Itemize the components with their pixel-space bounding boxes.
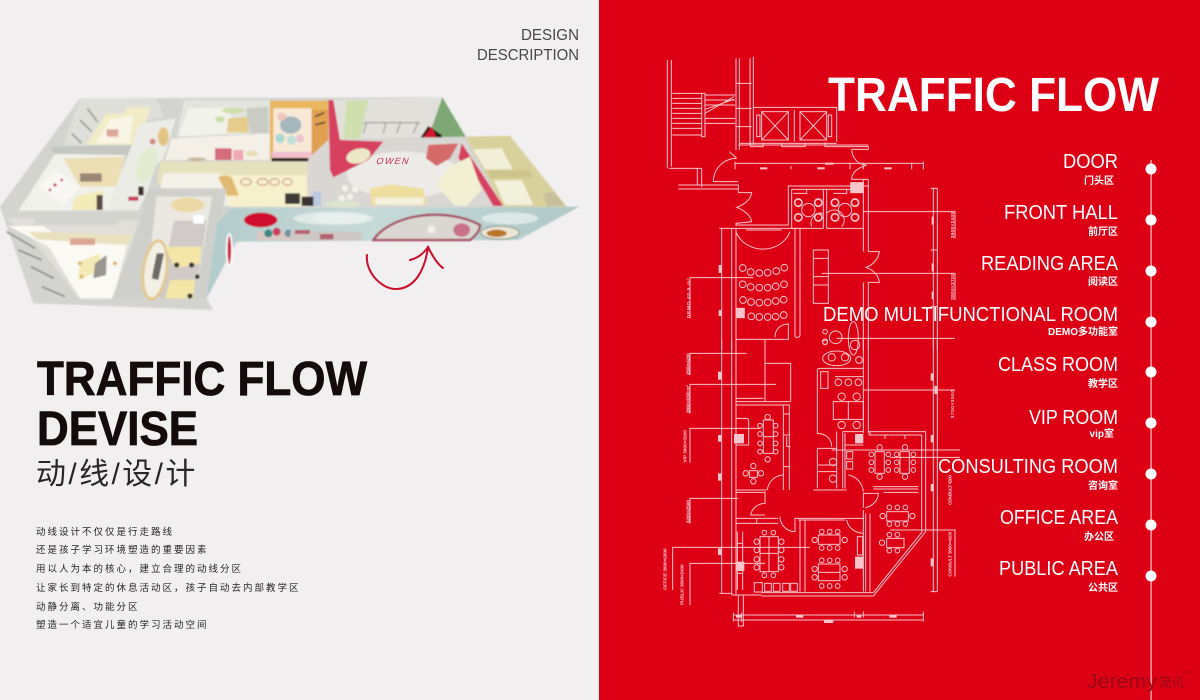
label: front hall	[1004, 202, 1118, 238]
model: central hall counter area	[157, 133, 320, 207]
label: reading area	[981, 253, 1119, 288]
plan: dimension labels, lower: 2500×4200	[685, 353, 691, 375]
body paragraph: 让家长到特定的休息活动区，孩子自动去内部教学区	[36, 582, 301, 594]
model: toy shop with pastel shelves	[270, 101, 328, 161]
brand logo	[1087, 670, 1190, 693]
model: right-hand khaki rooms	[466, 136, 567, 207]
label: front hall: 前厅区	[1088, 225, 1118, 238]
plan: dimension labels, lower	[663, 353, 956, 623]
header: design description: DESCRIPTION	[477, 47, 579, 64]
model: meeting room	[112, 188, 227, 301]
body paragraph: 塑造一个适宜儿童的学习活动空间	[36, 619, 209, 631]
brand logo: ®	[1185, 670, 1190, 677]
right red panel background	[599, 0, 1200, 700]
label: demo multifunctional room: DEMO多功能室	[1048, 325, 1118, 338]
plan: dimension labels, upper: 3900×2400	[950, 211, 956, 238]
plan: upper section with stairs, elevators and entrance	[667, 57, 956, 355]
label: office area: OFFICE AREA	[1000, 507, 1119, 529]
model: lower-left room	[7, 218, 139, 299]
body paragraph: 还是孩子学习环境塑造的重要因素	[36, 544, 209, 556]
plan: dimension labels, lower: CONSULT 3600×4100	[948, 531, 954, 577]
label: vip room	[1029, 407, 1118, 440]
heading: traffic flow devise: TRAFFIC FLOW	[37, 353, 368, 406]
plan: dimension labels, lower: 3700×3000	[950, 390, 956, 418]
label: office area: 办公区	[1084, 530, 1114, 543]
header: design description: DESIGN	[521, 27, 579, 44]
plan: dimension labels, lower: 2800×3300 m²	[685, 385, 691, 413]
model: back room with green wall	[333, 97, 466, 139]
label: consulting room: 咨询室	[1088, 479, 1118, 492]
zone labels list	[823, 151, 1119, 594]
label: door: DOOR	[1063, 151, 1118, 173]
body paragraph: 用以人为本的核心，建立合理的动线分区	[36, 563, 243, 575]
model: main hall with OWEN floor branding	[302, 100, 503, 207]
plan: dimension labels, lower: OFFICE 3900×2800	[663, 548, 669, 590]
model: grey outer shell	[0, 97, 567, 310]
3D floor model of the school	[0, 97, 579, 310]
label: demo multifunctional room	[823, 304, 1118, 338]
plan: dimension labels, upper: DEMO 40.5 m²	[686, 278, 692, 318]
label: public area: PUBLIC AREA	[999, 558, 1119, 580]
brand logo: Jeremy	[1087, 671, 1157, 693]
label: public area	[999, 558, 1119, 594]
model: corridor with wall decor	[107, 118, 176, 211]
label: reading area: READING AREA	[981, 253, 1119, 275]
model: upper middle office room	[177, 100, 270, 137]
model: teal exterior wall	[207, 207, 579, 298]
model: second-left room	[18, 145, 133, 211]
heading: traffic flow devise	[37, 353, 368, 456]
label: demo multifunctional room: DEMO MULTIFUNCTIONAL ROOM	[823, 304, 1118, 326]
label: reading area: 阅读区	[1088, 275, 1118, 288]
label: class room	[998, 354, 1118, 390]
brand logo: 简讯	[1159, 675, 1184, 690]
timeline with dots	[1146, 160, 1156, 700]
label: door	[1063, 151, 1118, 187]
label: front hall: FRONT HALL	[1004, 202, 1118, 224]
model: OWEN brand lettering: OWEN	[375, 156, 411, 166]
body paragraph	[36, 526, 301, 631]
left panel background	[0, 0, 599, 700]
label: door: 门头区	[1084, 174, 1114, 187]
plan: dimension labels, lower: VIP 3900×3200	[683, 430, 689, 463]
header: design description	[477, 27, 579, 64]
label: public area: 公共区	[1088, 581, 1118, 594]
chinese subtitle: 动/线/设/计	[36, 458, 198, 491]
plan: dimension labels, upper: 3800×2700	[950, 273, 956, 300]
label: vip room: vip室	[1090, 427, 1114, 440]
heading: traffic flow devise: DEVISE	[37, 403, 198, 456]
plan: dimension labels, lower: 3200×2500	[685, 500, 691, 523]
label: vip room: VIP ROOM	[1029, 407, 1118, 429]
label: office area	[1000, 507, 1119, 543]
architectural floor plan	[663, 57, 960, 626]
body paragraph: 动静分离、功能分区	[36, 601, 140, 613]
label: class room: 教学区	[1088, 377, 1118, 390]
plan: dimension labels, lower: CONSULT 4200	[948, 475, 954, 505]
body paragraph: 动线设计不仅仅是行走路线	[36, 526, 174, 538]
plan: dimension labels, lower: PUBLIC 3800×2400	[679, 564, 685, 605]
red hand-drawn arrow	[367, 247, 443, 289]
label: consulting room	[938, 456, 1118, 492]
label: class room: CLASS ROOM	[998, 354, 1118, 376]
main title: traffic flow: TRAFFIC FLOW	[828, 69, 1160, 122]
plan: lower section with classrooms and offices	[663, 339, 960, 626]
model: top-left room	[63, 98, 163, 145]
label: consulting room: CONSULTING ROOM	[938, 456, 1118, 478]
plan: dimension labels, upper	[686, 163, 956, 318]
